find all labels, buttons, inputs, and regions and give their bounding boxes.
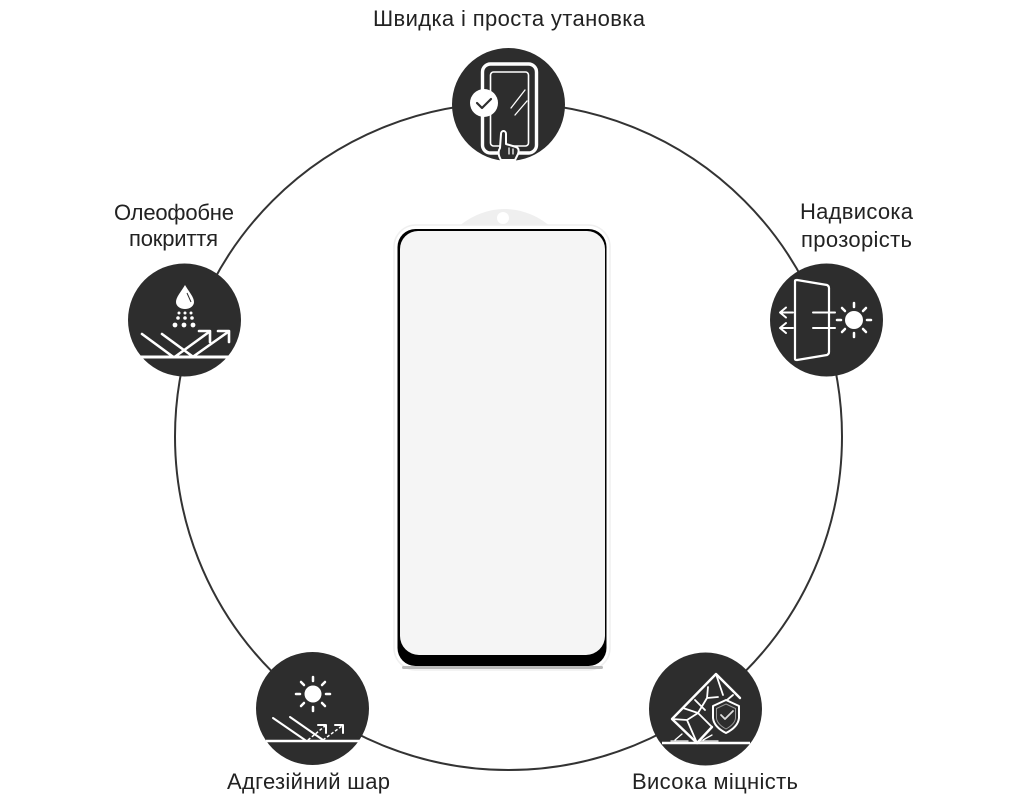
icon: high transparency [770,264,883,376]
label: quick installation: Швидка і проста утановка [373,6,646,31]
icon: high strength [649,652,762,766]
label: oleophobic coating: покриття [129,226,218,251]
icon: quick installation [452,48,565,161]
icon: adhesive layer [256,652,369,765]
icon: oleophobic coating [128,264,241,376]
label: oleophobic coating [114,200,234,251]
label: adhesive layer: Адгезійний шар [227,769,390,794]
label: high strength: Висока міцність [632,769,798,794]
large connecting ring [175,103,842,770]
label: high transparency [800,199,914,252]
label: high transparency: прозорість [801,227,912,252]
label: oleophobic coating: Олеофобне [114,200,234,225]
label: high transparency: Надвисока [800,199,914,224]
phone screen protector [394,209,610,670]
